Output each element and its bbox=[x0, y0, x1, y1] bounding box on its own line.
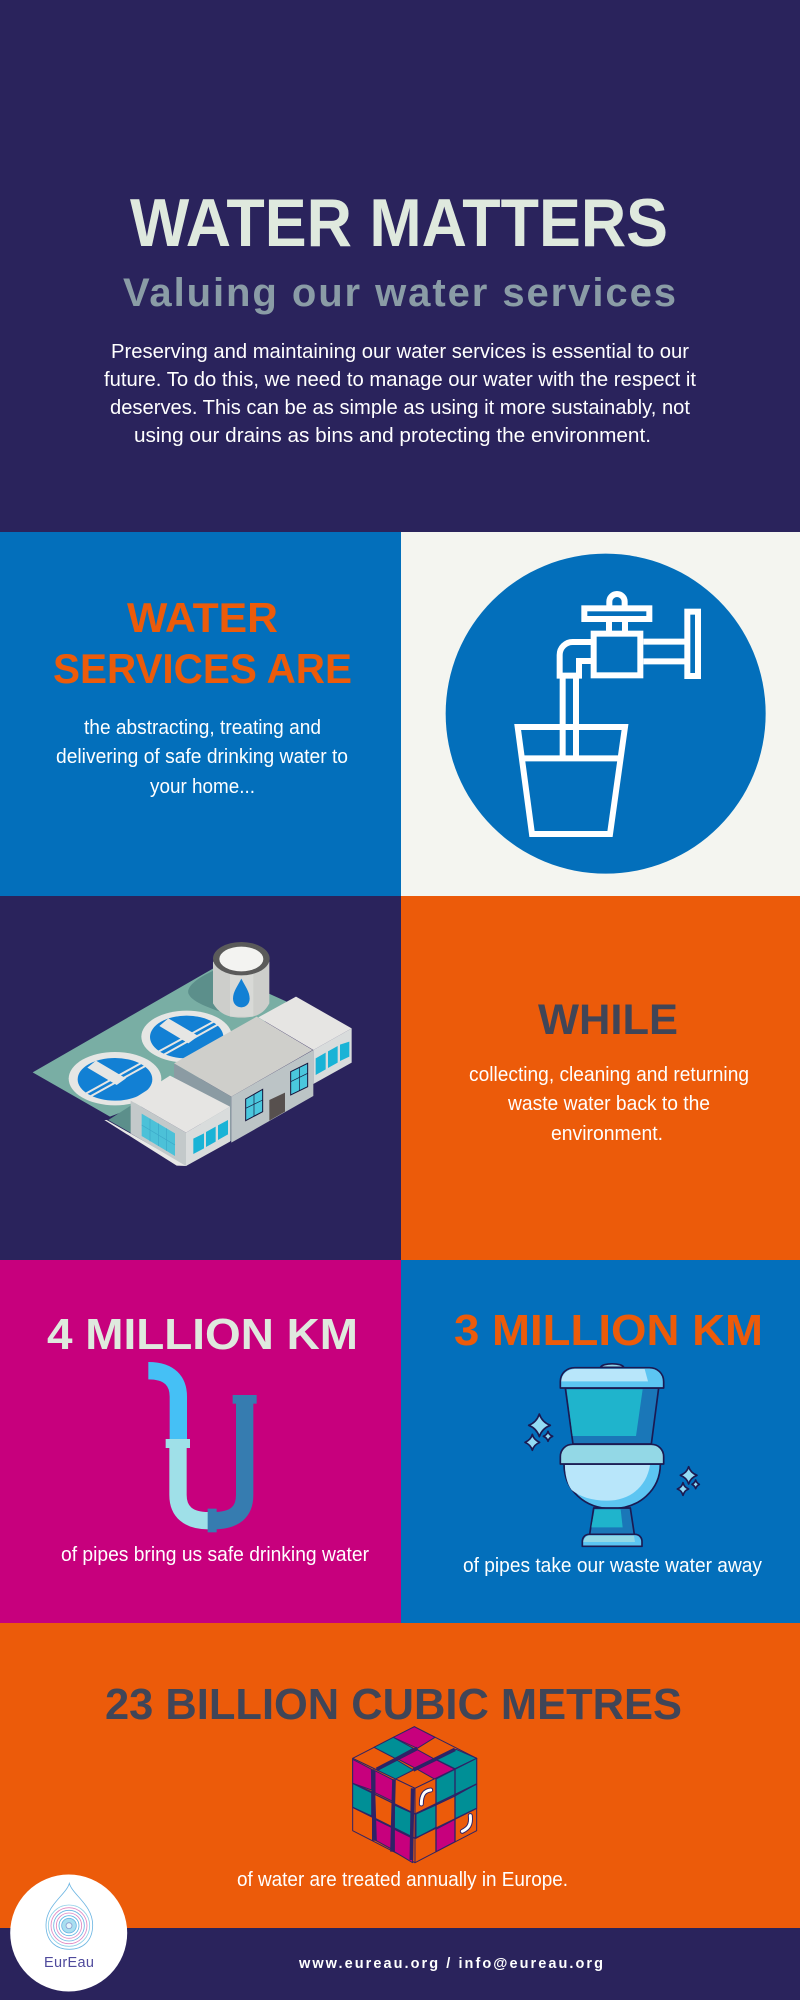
intro text: Preserving and maintaining our water services is essential to our bbox=[111, 341, 689, 363]
panel: treatment plant illustration bbox=[0, 896, 401, 1260]
panel: treated water volume bbox=[0, 1623, 800, 1928]
heading: water services are: SERVICES ARE bbox=[53, 645, 352, 692]
stat: 23 billion cubic metres: 23 BILLION CUBIC METRES bbox=[105, 1680, 682, 1729]
panel: footer bbox=[0, 1928, 800, 2000]
panel: header bbox=[0, 0, 800, 532]
icon: toilet bbox=[525, 1364, 699, 1546]
text: waste water description: environment. bbox=[551, 1123, 663, 1145]
panel: while bbox=[401, 896, 800, 1260]
text: waste water description: waste water back to the bbox=[507, 1093, 710, 1115]
logo: EurEau bbox=[10, 1874, 127, 1992]
heading: while: WHILE bbox=[538, 996, 678, 1044]
intro text bbox=[104, 341, 696, 447]
intro text: using our drains as bins and protecting the environment. bbox=[134, 425, 651, 447]
logo: EurEau: EurEau bbox=[44, 1955, 94, 1971]
text: waste water pipes: of pipes take our waste water away bbox=[463, 1555, 762, 1577]
icon: water treatment plant bbox=[33, 942, 352, 1166]
text: waste water description bbox=[469, 1064, 749, 1145]
icon: tap filling a glass bbox=[446, 554, 766, 874]
panel: tap illustration bbox=[401, 532, 800, 896]
panel: waste water pipes bbox=[401, 1260, 800, 1623]
intro text: future. To do this, we need to manage our water with the respect it bbox=[104, 369, 696, 391]
text: water services description bbox=[56, 717, 348, 798]
title: WATER MATTERS bbox=[130, 185, 668, 261]
icon: rubik cube bbox=[353, 1727, 477, 1863]
stat: 4 million km: 4 MILLION KM bbox=[47, 1310, 358, 1359]
icon: u-shaped pipe bbox=[148, 1371, 257, 1532]
intro text: deserves. This can be as simple as using it more sustainably, not bbox=[110, 397, 690, 419]
heading: water services are bbox=[53, 594, 352, 692]
subtitle: Valuing our water services bbox=[123, 271, 676, 315]
panel: water services are bbox=[0, 532, 401, 896]
text: waste water description: collecting, cleaning and returning bbox=[469, 1064, 749, 1086]
heading: water services are: WATER bbox=[127, 594, 278, 641]
text: water services description: delivering of safe drinking water to bbox=[56, 746, 348, 768]
contact details: www.eureau.org / info@eureau.org bbox=[298, 1956, 603, 1972]
text: water services description: your home... bbox=[150, 776, 255, 798]
panel: drinking water pipes bbox=[0, 1260, 401, 1623]
text: water services description: the abstracting, treating and bbox=[84, 717, 321, 739]
text: drinking water pipes: of pipes bring us safe drinking water bbox=[61, 1544, 369, 1566]
text: treated water: of water are treated annually in Europe. bbox=[237, 1869, 568, 1891]
stat: 3 million km: 3 MILLION KM bbox=[454, 1306, 763, 1355]
